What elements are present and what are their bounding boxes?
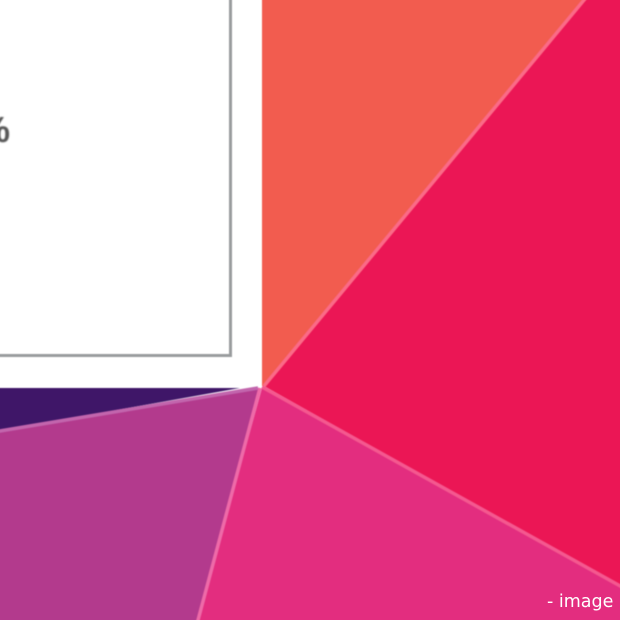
panel: pink polygon [193, 388, 620, 620]
text panel: white bordered box [0, 0, 232, 357]
panel: dark purple polygon [0, 388, 240, 434]
caption: image label: - image [547, 592, 613, 612]
panel: magenta polygon [0, 388, 260, 620]
panel: crimson polygon [264, 0, 620, 597]
panel: orange polygon [262, 0, 601, 386]
